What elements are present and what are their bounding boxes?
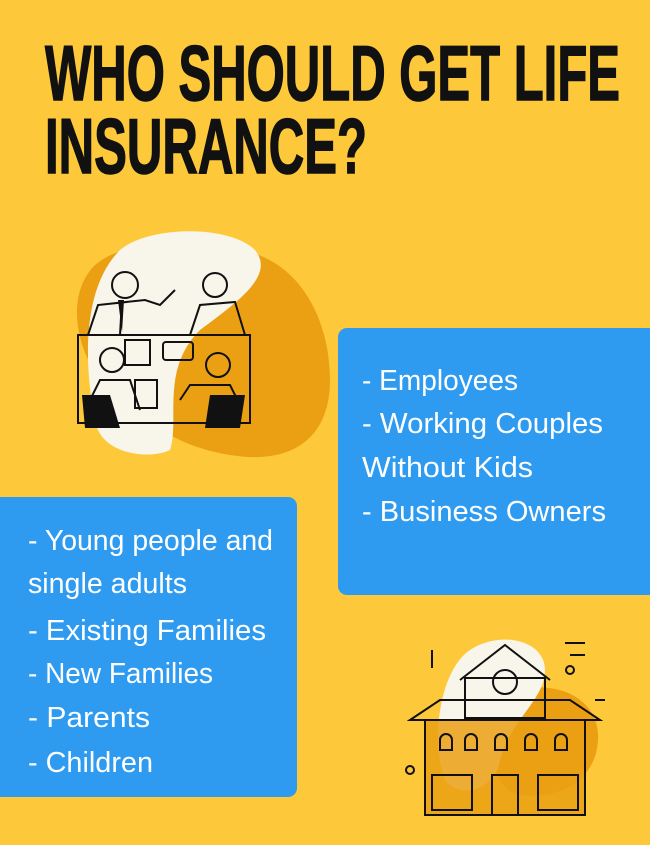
panel: families box — [0, 497, 297, 797]
list: employees: - Working Couples — [362, 408, 603, 440]
list: families: - Existing Families — [28, 615, 266, 647]
list: families — [28, 525, 273, 779]
list: families: - Parents — [28, 702, 150, 734]
list: families: - Young people and — [28, 525, 273, 557]
title: INSURANCE? — [45, 102, 367, 190]
panel: employees box — [338, 328, 650, 595]
list: employees — [362, 365, 606, 528]
list: families: - New Families — [28, 658, 213, 690]
list: families: - Children — [28, 747, 153, 779]
list: employees: - Employees — [362, 365, 518, 397]
list: employees: Without Kids — [362, 452, 533, 484]
illustration: house — [406, 640, 605, 815]
list: families: single adults — [28, 568, 187, 600]
title — [45, 29, 620, 190]
list: employees: - Business Owners — [362, 496, 606, 528]
illustration: business meeting — [77, 231, 330, 457]
